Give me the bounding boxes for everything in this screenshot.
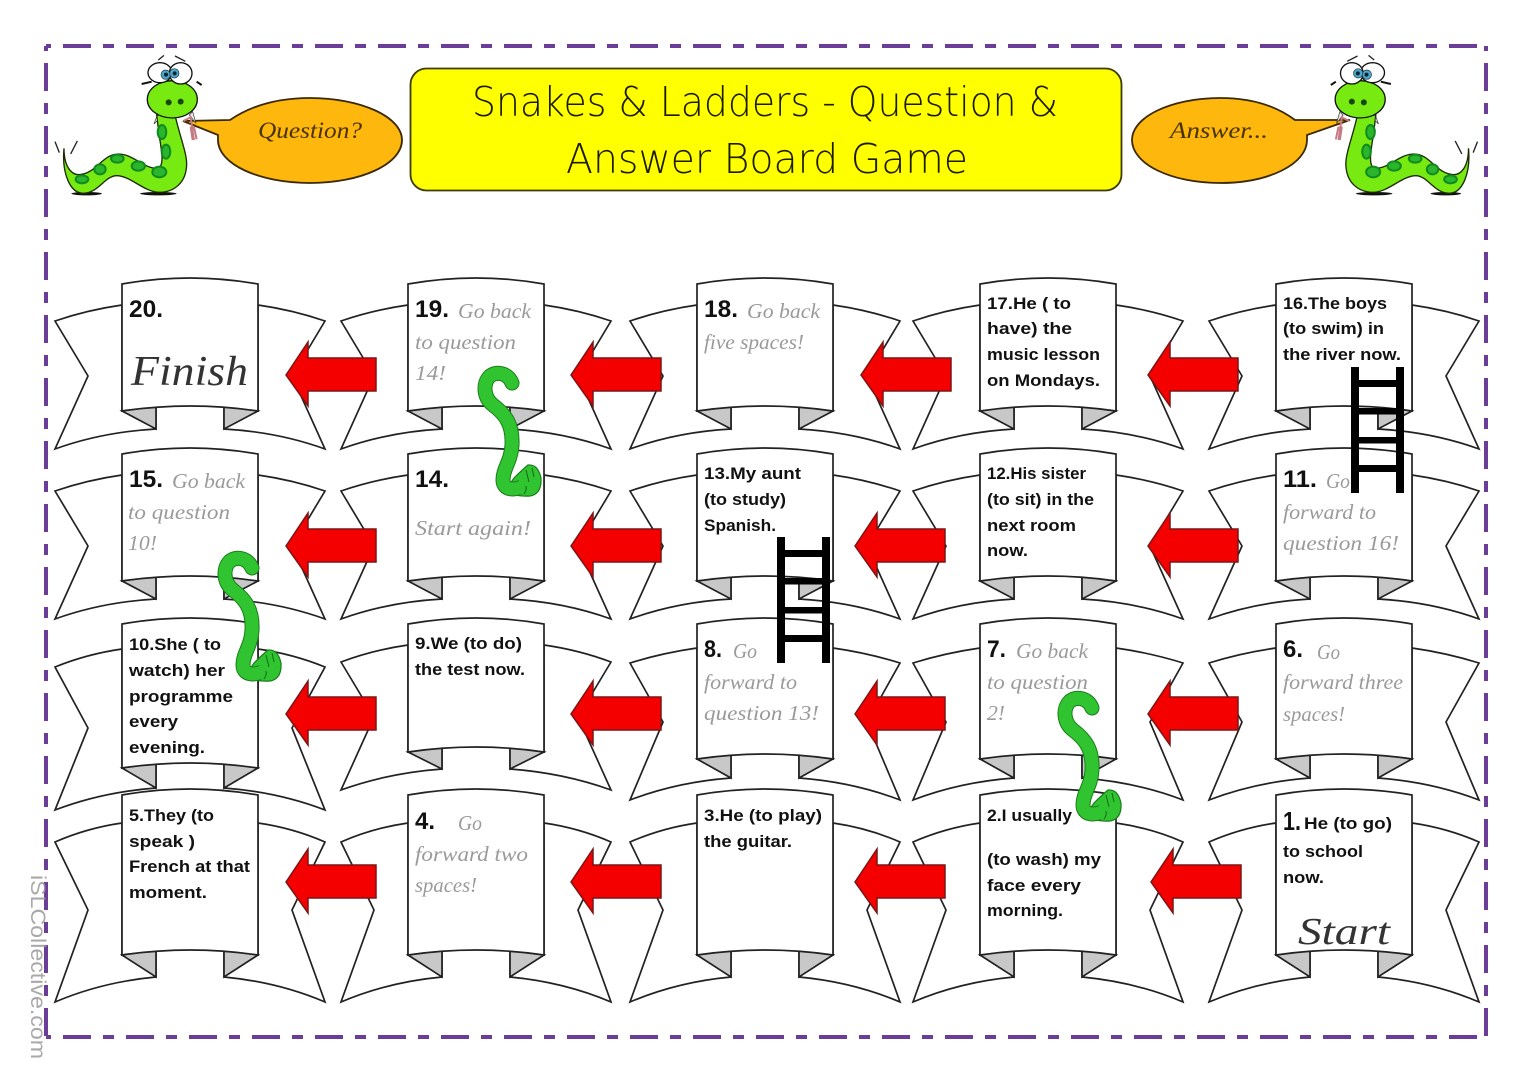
icon: right cartoon snake — [1331, 55, 1478, 195]
square 10: watch) her — [128, 661, 225, 680]
title text — [472, 78, 1058, 183]
square 5: moment. — [129, 883, 207, 902]
square 11: forward to — [1283, 500, 1376, 524]
square 4: 4. — [415, 808, 435, 835]
square 10: programme — [129, 687, 233, 706]
square 18: Go back — [747, 299, 821, 323]
square 15: 15. — [129, 466, 163, 493]
square 8: forward to — [704, 670, 797, 694]
square 17: music lesson — [987, 345, 1100, 364]
green snake: 15 to 10 — [225, 558, 281, 681]
square 11: question 16! — [1283, 531, 1399, 555]
square 8: Go — [733, 639, 757, 663]
answer speech bubble: Answer... — [1168, 118, 1268, 143]
square 19: to question — [415, 330, 516, 354]
square 11: 11. — [1283, 466, 1317, 493]
square 5: 5.They (to — [129, 806, 214, 825]
green snake: 19 to 14 — [485, 373, 541, 496]
square 13: Spanish. — [704, 516, 776, 535]
square 6: spaces! — [1283, 702, 1345, 726]
square 19: 19. — [415, 296, 449, 323]
square 10 — [55, 618, 325, 810]
square 4: spaces! — [415, 873, 477, 897]
square 19: 14! — [415, 361, 446, 385]
square 1: Start — [1298, 911, 1392, 953]
square 20 — [55, 278, 325, 449]
square 6: Go — [1317, 640, 1340, 664]
square 16 — [1209, 278, 1479, 449]
square 3: 3.He (to play) — [704, 806, 822, 825]
square 7: 7. — [987, 636, 1006, 663]
square 12: 12.His sister — [987, 464, 1086, 483]
square 10: evening. — [129, 738, 205, 757]
square 7: Go back — [1016, 639, 1089, 663]
square 12: now. — [987, 541, 1028, 560]
square 12: next room — [987, 516, 1076, 535]
square 9: 9.We (to do) — [415, 634, 522, 653]
square 10: every — [129, 712, 179, 731]
square 5: speak ) — [129, 832, 195, 851]
square 14: Start again! — [415, 516, 531, 540]
square 5: French at that — [129, 857, 250, 876]
square 19: Go back — [458, 299, 532, 323]
ladder: 13 to 8 — [777, 537, 830, 663]
watermark: iSLCollective.com — [26, 875, 49, 1059]
square 17 — [913, 278, 1183, 449]
square 2 — [913, 789, 1183, 1002]
square 3: the guitar. — [704, 832, 792, 851]
square 1: now. — [1283, 868, 1324, 887]
square 4: Go — [458, 811, 482, 835]
square 1: to school — [1283, 842, 1363, 861]
square 7 — [913, 618, 1183, 800]
square 18: five spaces! — [704, 330, 804, 354]
square 6: 6. — [1283, 636, 1303, 663]
square 2: 2.I usually — [987, 806, 1073, 825]
square 1: He (to go) — [1304, 814, 1392, 833]
square 1: 1. — [1283, 806, 1301, 836]
square 2: (to wash) my — [987, 850, 1102, 869]
square 15: 10! — [128, 531, 157, 555]
square 16: (to swim) in — [1283, 319, 1384, 338]
square 18: 18. — [704, 296, 738, 323]
square 2: morning. — [987, 901, 1063, 920]
square 4 — [341, 789, 611, 1002]
square 7: 2! — [987, 701, 1005, 725]
icon: left cartoon snake — [55, 55, 202, 195]
square 13 — [630, 448, 900, 619]
square 8 — [630, 618, 900, 800]
square 11: Go — [1326, 469, 1350, 493]
square 20: Finish — [130, 349, 248, 395]
square 12: (to sit) in the — [987, 490, 1094, 509]
square 15: to question — [128, 500, 230, 524]
question speech bubble: Question? — [258, 118, 363, 143]
question speech bubble — [183, 98, 402, 183]
square 15 — [55, 448, 325, 619]
title text: Answer Board Game — [566, 135, 968, 183]
square 16: the river now. — [1283, 345, 1401, 364]
square 2: face every — [987, 876, 1082, 895]
square 10: 10.She ( to — [129, 635, 221, 654]
square 6 — [1209, 618, 1479, 800]
square 15: Go back — [172, 469, 246, 493]
square 14: 14. — [415, 466, 449, 493]
square 1 — [1209, 789, 1479, 1002]
square 18 — [630, 278, 900, 449]
square 9 — [341, 618, 611, 790]
square 20: 20. — [129, 296, 163, 323]
square 17: have) the — [987, 319, 1072, 338]
answer speech bubble — [1132, 98, 1350, 183]
green snake: 7 to 2 — [1065, 698, 1121, 821]
square 5 — [55, 789, 325, 1002]
square 7: to question — [987, 670, 1088, 694]
square 8: 8. — [704, 636, 722, 663]
square 17: 17.He ( to — [987, 294, 1071, 313]
square 9: the test now. — [415, 660, 525, 679]
square 4: forward two — [415, 842, 528, 866]
title text: Snakes & Ladders - Question & — [472, 78, 1058, 126]
square 12 — [913, 448, 1183, 619]
ladder: 16 to 11 — [1351, 367, 1404, 493]
square 19 — [341, 278, 611, 449]
square 11 — [1209, 448, 1479, 619]
square 13: (to study) — [704, 490, 786, 509]
title box — [410, 68, 1122, 190]
arrows between squares — [286, 342, 1241, 913]
square 17: on Mondays. — [987, 371, 1100, 390]
square 8: question 13! — [704, 701, 819, 725]
square 16: 16.The boys — [1283, 294, 1387, 313]
square 14 — [341, 448, 611, 619]
square 3 — [630, 789, 900, 1002]
square 6: forward three — [1283, 670, 1403, 694]
square 13: 13.My aunt — [704, 464, 801, 483]
